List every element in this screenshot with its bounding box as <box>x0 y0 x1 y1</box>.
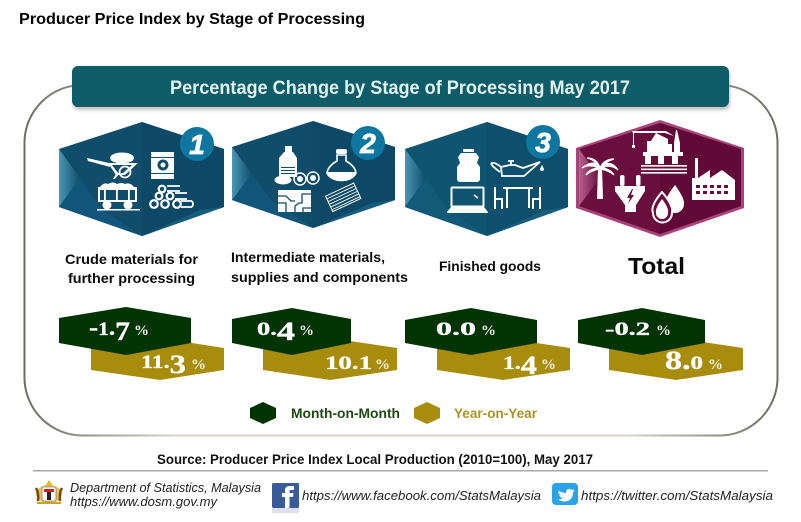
label: crude materials: Crude materials for <box>65 251 199 267</box>
icon: wood board <box>326 183 361 212</box>
badge: number 1 <box>180 127 214 161</box>
legend: month-on-month <box>250 402 400 424</box>
icon: twitter <box>552 483 578 505</box>
title: Producer Price Index by Stage of Processing <box>19 11 365 28</box>
values: crude materials: 11. <box>141 352 164 373</box>
icon: cooking oil jug <box>457 149 480 182</box>
icon: mine cart <box>97 182 140 210</box>
footer: department name: Department of Statistics, Malaysia <box>70 480 261 495</box>
values: crude materials: % <box>191 357 206 373</box>
icon: wheelbarrow <box>87 152 138 179</box>
icon: logs <box>150 186 193 208</box>
icon: circuit block <box>278 190 311 212</box>
values: intermediate materials <box>232 308 397 380</box>
values: intermediate materials: % <box>375 357 390 373</box>
values: total: % <box>656 323 671 339</box>
icon: oil can <box>491 161 544 176</box>
icon: offshore oil rig <box>632 130 687 174</box>
badge: number 3: 3 <box>535 127 551 158</box>
values: intermediate materials: 10.1 <box>325 353 372 374</box>
icon: facebook <box>272 483 299 513</box>
icon: water drops <box>652 185 684 222</box>
values: crude materials: -1. <box>89 315 114 341</box>
footer: department name <box>70 480 261 509</box>
values: finished goods: % <box>541 357 556 373</box>
footer: twitter url: https://twitter.com/StatsMalaysia <box>581 488 773 503</box>
banner heading: Percentage Change by Stage of Processing May 2017 <box>170 78 630 99</box>
values: crude materials: % <box>134 323 149 339</box>
values: intermediate materials: 4 <box>277 317 295 346</box>
values: intermediate materials: 0. <box>257 319 271 340</box>
values: total: % <box>708 357 723 373</box>
badge: number 2 <box>351 126 385 160</box>
source note: Source: Producer Price Index Local Production (2010=100), May 2017 <box>157 452 593 467</box>
legend: month-on-month: Month-on-Month <box>291 405 400 421</box>
label: crude materials: further processing <box>68 270 195 286</box>
panel: crude materials icon hexagon <box>59 122 224 236</box>
icon: Malaysia crest <box>36 480 62 504</box>
panel: rounded frame <box>24 85 778 436</box>
label: total: Total <box>628 253 685 279</box>
values: intermediate materials: % <box>299 323 314 339</box>
values: crude materials: 7 <box>115 317 130 346</box>
badge: number 1: 1 <box>189 129 205 160</box>
values: finished goods <box>405 308 570 380</box>
values: finished goods: 0.0 <box>436 319 476 340</box>
values: finished goods: % <box>481 323 496 339</box>
values: crude materials <box>59 307 224 380</box>
label: intermediate materials: Intermediate materials, <box>231 249 385 265</box>
legend: year-on-year <box>414 402 538 424</box>
label: intermediate materials: supplies and components <box>231 269 408 285</box>
badge: number 2: 2 <box>359 128 376 159</box>
icon: table and chairs <box>495 187 540 209</box>
icon: flask <box>327 149 356 181</box>
panel: intermediate materials icon hexagon <box>232 121 395 228</box>
label: crude materials <box>65 251 199 286</box>
values: total <box>578 308 743 380</box>
footer: department name: https://www.dosm.gov.my <box>70 494 218 509</box>
label: finished goods: Finished goods <box>439 258 541 274</box>
legend: year-on-year: Year-on-Year <box>454 405 538 421</box>
values: finished goods: 4 <box>521 351 537 380</box>
banner heading <box>72 66 730 110</box>
footer: facebook url: https://www.facebook.com/StatsMalaysia <box>302 488 541 503</box>
panel: total icon hexagon <box>576 120 744 237</box>
icon: bottle, lemon and rings <box>274 146 319 185</box>
label: intermediate materials <box>231 249 408 285</box>
icon: power plug <box>615 175 645 212</box>
values: crude materials: 3 <box>170 350 186 379</box>
icon: laptop <box>447 188 488 213</box>
panel: finished goods icon hexagon <box>405 122 568 236</box>
values: total: 8. 0 <box>665 346 703 375</box>
icon: palm tree <box>582 158 618 199</box>
values: finished goods: 1. <box>503 353 517 374</box>
icon: oil barrel <box>151 152 174 179</box>
icon: factory <box>692 158 735 200</box>
values: total: -0.2 <box>605 319 650 340</box>
badge: number 3 <box>526 125 560 159</box>
